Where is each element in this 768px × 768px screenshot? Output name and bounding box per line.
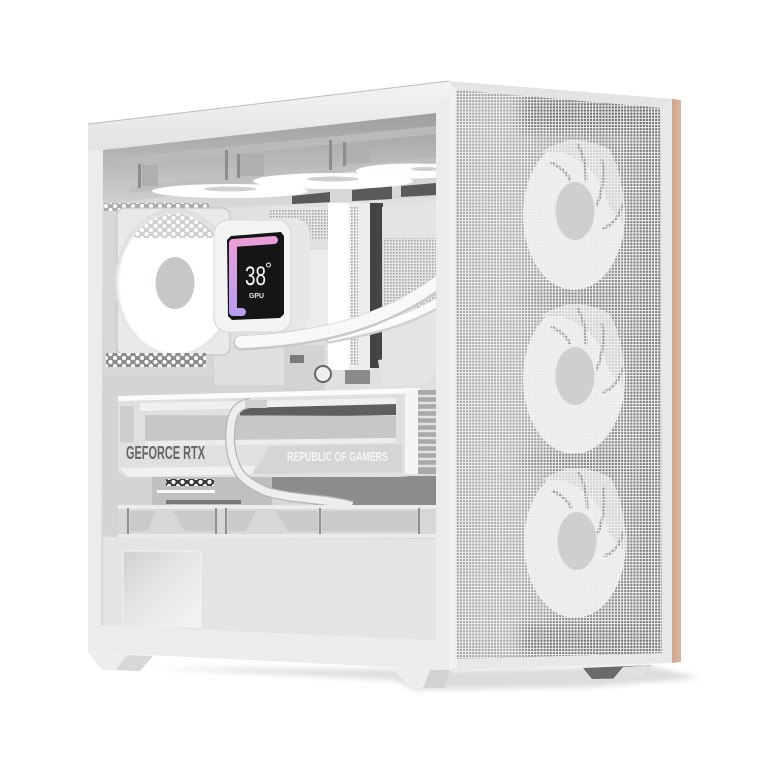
fan hubs xyxy=(556,182,596,570)
left edge perforations upper xyxy=(104,203,209,211)
fan 2 blades xyxy=(523,304,625,454)
pump block with display xyxy=(214,218,310,332)
rear exhaust fan xyxy=(115,208,235,356)
gpu side grill xyxy=(405,390,436,474)
white cable xyxy=(230,400,352,506)
degree symbol xyxy=(266,263,270,267)
case side frame xyxy=(88,81,449,670)
left gray area around gpu xyxy=(103,375,213,535)
lower rear perforations xyxy=(106,353,206,367)
black connectors xyxy=(292,183,436,206)
psu window xyxy=(123,551,201,627)
interior window xyxy=(100,110,464,645)
gpu backdrop dark band xyxy=(272,476,436,505)
black bracket xyxy=(370,203,383,368)
fan 3 blades xyxy=(524,468,626,618)
gpu label: GPU xyxy=(249,291,264,300)
temperature reading: 38 xyxy=(245,261,266,291)
front mesh xyxy=(450,85,670,665)
display screen xyxy=(227,232,284,320)
top shadow band xyxy=(103,113,436,205)
top radiator rail xyxy=(207,126,436,150)
lower motherboard parts xyxy=(213,345,383,394)
republic of gamers label: REPUBLIC OF GAMERS xyxy=(287,450,388,464)
gradient ring on display xyxy=(233,240,274,312)
graphics card xyxy=(118,388,436,477)
motherboard area xyxy=(213,197,436,395)
lower board xyxy=(152,476,272,506)
mesh lattice xyxy=(450,85,670,665)
left soft light xyxy=(464,111,492,638)
geforce rtx label: GEFORCE RTX xyxy=(126,443,205,463)
mesh shadows xyxy=(522,95,660,655)
power supply shroud xyxy=(103,537,436,640)
gpu lower right plate xyxy=(252,444,402,474)
right side panel xyxy=(382,203,436,362)
top fan blocks xyxy=(142,159,370,186)
upper vent panel xyxy=(270,207,328,239)
white cooler tower xyxy=(328,203,370,370)
wood side panel xyxy=(672,99,681,663)
interior back wall xyxy=(100,110,440,645)
top fan mount rail xyxy=(130,157,436,193)
ribbed block behind pump xyxy=(305,250,328,329)
top fans xyxy=(152,164,464,198)
case front panel xyxy=(449,81,672,670)
floor shadow xyxy=(150,666,700,690)
fan 1 blades xyxy=(523,140,625,290)
bottom fans xyxy=(118,505,436,538)
top fan posts xyxy=(138,140,346,188)
pipe tubes xyxy=(241,276,446,343)
case feet xyxy=(88,652,652,688)
